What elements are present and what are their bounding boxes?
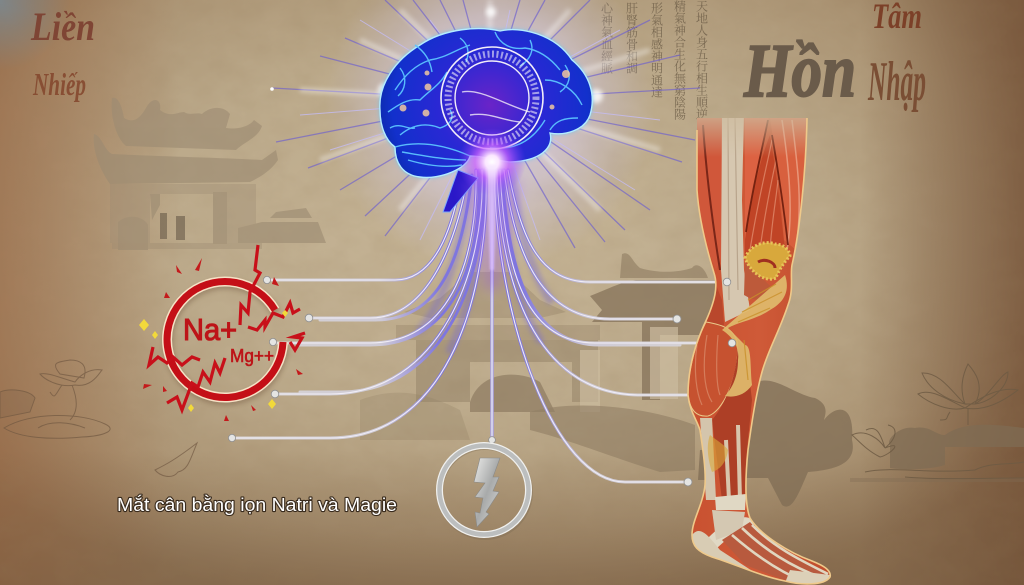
calligraphy: top-right xyxy=(743,0,926,113)
yellow sparkles xyxy=(139,310,288,412)
nerve fibre: central line to lightning icon xyxy=(490,165,494,438)
knee and lower thigh xyxy=(744,262,770,300)
brain synapse nodes xyxy=(400,70,570,116)
ankle straps xyxy=(715,494,746,510)
caption: Mắt cân bằng iọn Natri và Magie xyxy=(117,494,397,515)
central glowing shaft below brain xyxy=(462,165,522,290)
muscular leg xyxy=(687,118,831,585)
broken red ring xyxy=(167,281,283,397)
infographic canvas: Nhập xyxy=(868,51,926,113)
brain radiance rays xyxy=(270,0,700,270)
vertical Han-Nom manuscript xyxy=(598,0,710,120)
vertical Han-Nom manuscript: 精氣神合生化無窮陰陽 xyxy=(672,0,688,120)
medallion xyxy=(441,47,543,149)
calligraphy: top-left: Nhiếp xyxy=(32,66,86,102)
calf xyxy=(688,322,738,416)
shin xyxy=(712,340,752,500)
magnesium label: Mg++ xyxy=(230,346,274,366)
cerebrum and cerebellum xyxy=(380,29,592,177)
red fragments xyxy=(143,258,303,421)
nerve fibres: right branch set xyxy=(494,168,732,482)
calligraphy: top-left xyxy=(30,4,95,102)
thigh muscles xyxy=(698,152,706,236)
top fade of thigh xyxy=(697,118,806,154)
ring shadow xyxy=(168,284,284,400)
nerve terminal dots xyxy=(228,276,736,486)
vertical Han-Nom manuscript: 天地人身五行相生順逆 xyxy=(694,0,710,120)
leg outline xyxy=(688,118,830,584)
brain base glow xyxy=(458,128,526,196)
red lightning cracks xyxy=(149,245,305,410)
vertical Han-Nom manuscript: 肝腎筋骨和調 xyxy=(624,2,640,74)
vertical Han-Nom manuscript: 形氣相感神明通達 xyxy=(648,2,666,98)
brain stem xyxy=(443,170,478,212)
brain xyxy=(380,29,592,212)
golden dragon on leg xyxy=(708,243,790,472)
central tendon band xyxy=(721,112,750,322)
right trees and lotus scenery xyxy=(698,364,1024,507)
brain gyri xyxy=(388,32,582,166)
left temple illustration xyxy=(94,98,326,250)
panel: ion imbalance symbol xyxy=(139,245,305,421)
leg anatomy clip group xyxy=(688,118,830,584)
left lotus illustration xyxy=(0,360,197,476)
sodium label: Na+ xyxy=(183,312,237,347)
nerve fibres: left branch set xyxy=(232,168,550,438)
calligraphy: top-right: Hồn xyxy=(743,29,856,113)
central pagoda illustration xyxy=(360,253,722,472)
icon: lightning bolt in ring xyxy=(440,446,530,537)
foot xyxy=(692,531,752,570)
vertical Han-Nom manuscript: 心神氣血經脈 xyxy=(598,2,616,74)
calligraphy: top-left: Liền xyxy=(30,4,95,49)
